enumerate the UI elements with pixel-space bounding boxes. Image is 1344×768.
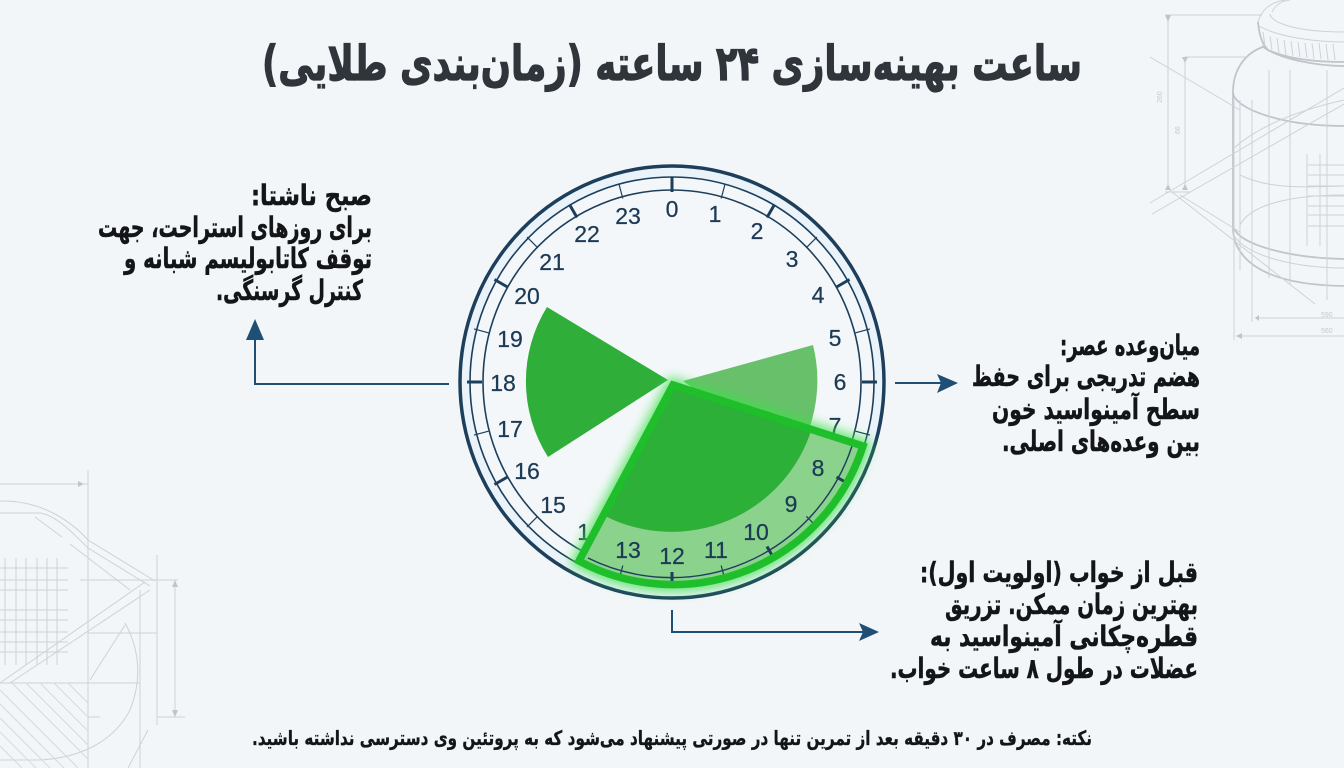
hour numbers: 20 <box>514 283 540 309</box>
labels under the highlight <box>577 413 841 545</box>
callout: afternoon snack: هضم تدریجی برای حفظ <box>972 360 1200 393</box>
highlighted wedge outline <box>579 385 863 585</box>
labels under the highlight: 14 <box>577 519 603 545</box>
callout: afternoon snack: میان‌وعده عصر: <box>1060 329 1200 362</box>
callout: afternoon snack <box>972 329 1200 458</box>
callout: before sleep: بهترین زمان ممکن. تزریق <box>945 588 1198 621</box>
callout: morning breakfast: توقف کاتابولیسم شبانه و <box>123 242 372 275</box>
hour numbers: 1 <box>709 201 721 227</box>
callout: afternoon snack: سطح آمینواسید خون <box>992 392 1200 426</box>
inner dark sector <box>605 385 812 532</box>
highlighted wedge: before sleep <box>579 385 863 585</box>
hour numbers: 18 <box>490 370 516 396</box>
hour numbers: 22 <box>574 221 600 247</box>
hour numbers: 4 <box>812 282 825 308</box>
blueprint sketch: protein jar: 66 <box>1175 126 1182 134</box>
hour numbers: 6 <box>834 369 846 395</box>
hour numbers: 8 <box>812 455 824 481</box>
callout: before sleep: عضلات در طول ۸ ساعت خواب. <box>890 652 1198 685</box>
callout: before sleep: قبل از خواب (اولویت اول): <box>920 556 1198 589</box>
hour numbers: 2 <box>751 218 763 244</box>
arrow: clock to breakfast <box>246 319 449 384</box>
hour numbers <box>490 196 846 569</box>
footnote: نکته: مصرف در ۳۰ دقیقه بعد از تمرین تنها در صورتی پیشنهاد می‌شود که به پروتئین وی دسترسی نداشته باشید. <box>252 726 1092 751</box>
labels under the highlight: 7 <box>829 413 841 439</box>
hour numbers: 16 <box>514 458 540 484</box>
hour numbers: 23 <box>615 203 641 229</box>
hour numbers: 13 <box>615 537 641 563</box>
hour numbers: 5 <box>829 325 841 351</box>
clock <box>460 166 884 598</box>
sector: breakfast <box>526 307 668 457</box>
hour numbers: 3 <box>786 246 798 272</box>
hour ticks <box>467 177 877 582</box>
callout: morning breakfast: صبح ناشتا: <box>251 179 372 212</box>
callout: before sleep: قطره‌چکانی آمینواسید به <box>930 619 1198 653</box>
blueprint sketch: protein jar <box>1150 0 1344 340</box>
blueprint sketch: protein jar: 260 <box>1157 91 1164 103</box>
hour numbers: 12 <box>659 543 685 569</box>
arrow: clock to snack <box>895 374 958 393</box>
hour numbers: 9 <box>785 491 797 517</box>
callout: afternoon snack: بین وعده‌های اصلی. <box>1002 425 1200 458</box>
blueprint sketch: protein jar: 560 <box>1321 328 1333 335</box>
hour numbers: 10 <box>743 519 769 545</box>
hour numbers: 19 <box>497 326 523 352</box>
callout: morning breakfast <box>98 179 372 307</box>
blueprint sketch: protein jar: 590 <box>1321 312 1333 319</box>
highlighted wedge glow <box>579 385 863 585</box>
hour numbers: 15 <box>540 492 566 518</box>
clock face rings <box>460 166 884 598</box>
callout: morning breakfast: کنترل گرسنگی. <box>216 274 363 307</box>
hour numbers: 0 <box>666 196 678 222</box>
hour numbers: 11 <box>704 537 728 563</box>
title: ساعت بهینه‌سازی ۲۴ ساعته (زمان‌بندی طلایی) <box>262 36 1082 92</box>
hour numbers: 21 <box>539 249 565 275</box>
blueprint sketch: lower left technical drawing <box>0 470 185 768</box>
arrow: clock to before sleep <box>672 610 879 641</box>
callout: before sleep <box>890 556 1198 685</box>
inner arc over wedge <box>588 446 852 578</box>
callout: morning breakfast: برای روزهای استراحت، جهت <box>98 211 372 244</box>
sector: afternoon snack <box>683 345 817 450</box>
hour numbers: 17 <box>497 416 523 442</box>
